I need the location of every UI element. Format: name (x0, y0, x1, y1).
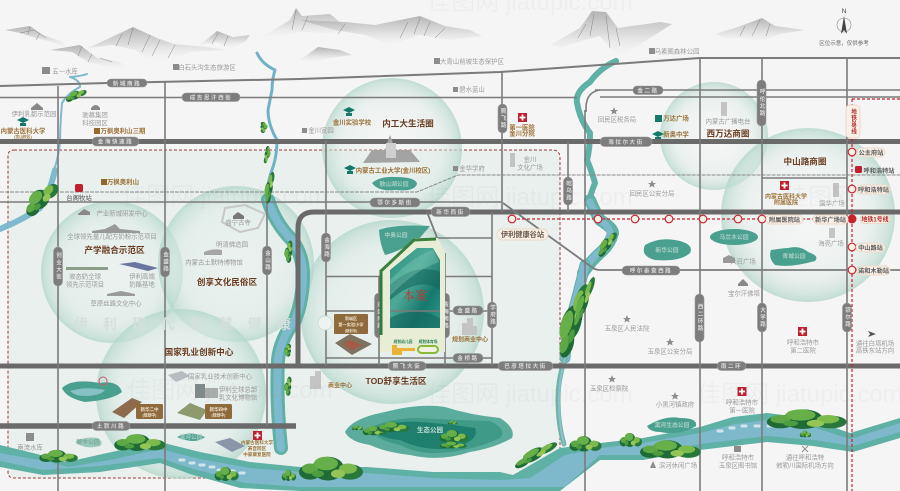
park labels: 敕山湖公园 (380, 180, 409, 188)
road name pills: 金盛路 (457, 306, 479, 314)
compass and disclaimer: N (842, 8, 847, 15)
eco lake park: 生态公园 (417, 425, 444, 434)
park labels: 黑河生态公园 (655, 421, 690, 429)
gray place labels: 奶酪基地 (129, 280, 155, 288)
metro station labels: 呼和浩特站 (864, 167, 894, 175)
road name pills: 金海路 (323, 236, 330, 258)
gray place labels: 玉泉区公安分局 (648, 346, 692, 356)
park labels: 马兰木公园 (720, 233, 749, 241)
road name pills: 新华西街 (436, 208, 465, 216)
road name pills: 鄂尔多斯街 (377, 198, 413, 206)
park labels: 滨河公园 (179, 433, 203, 441)
parks and complex thumbnails (62, 381, 122, 402)
metro station labels: 附属医院站 (769, 216, 800, 224)
brown place labels: 商业中心 (328, 382, 352, 390)
road name pills (54, 79, 852, 430)
gray place labels: 全球领先量儿配方奶粉示范项目 (67, 232, 157, 240)
district headings: 内工大生活圈 (382, 118, 434, 128)
gray place labels: 玉泉区图书馆 (719, 460, 757, 470)
metro station labels: 伊利健康谷站 (501, 230, 544, 239)
gray place labels: 海亮广场 (818, 238, 844, 248)
compass and disclaimer (819, 8, 869, 47)
gray place labels: 草原丝路文化中心 (90, 298, 142, 308)
gray place labels: 碧水蓝山 (459, 84, 485, 94)
road name pills: 金盛南路 (376, 300, 383, 330)
metro station labels: 地铁2号线 (850, 108, 857, 135)
watermark (122, 0, 900, 408)
park labels: 新华公园 (655, 246, 679, 254)
road name pills: 呼伦北路 (758, 88, 765, 117)
brown place labels: 附属医院 (774, 198, 798, 206)
metro station labels: 地铁1号线 (861, 216, 889, 224)
gray place labels: 乌素图森林公园 (655, 46, 699, 56)
road name pills: 土默川路 (97, 422, 125, 430)
district headings: 国家乳业创新中心 (165, 346, 234, 357)
watermark: 佳图网 jiatupic.com (127, 377, 333, 404)
brown place labels: 金川实验学校 (333, 118, 372, 126)
gray place labels: 回民区公安分局 (630, 188, 674, 198)
site name: 本案 (402, 288, 428, 303)
road name pills: 成吉思汗西街 (190, 94, 232, 102)
brown place labels: 中蒙康复医院 (243, 451, 271, 458)
watermark: 佳图网 jiatupic.com (427, 184, 633, 211)
road name pills: 金二路 (637, 86, 659, 94)
metro station labels (497, 105, 894, 275)
gray place labels: 驰慕集团 (82, 110, 108, 119)
gray place labels: 五一水库 (52, 66, 78, 76)
gray place labels: 大召广场 (730, 256, 756, 266)
watermark: 佳图网 jiatupic.com (697, 381, 900, 408)
gray place labels: 产业新城研发中心 (96, 208, 148, 218)
building glyphs (510, 153, 515, 167)
park labels: 青城公园 (782, 252, 806, 260)
hospital icons (75, 113, 807, 440)
road name pills: 巴彦塔拉大街 (504, 362, 547, 370)
road name pills: 金山路 (264, 249, 271, 271)
metro station labels: 诺和木勒站 (858, 267, 889, 275)
road name pills: 西二环路 (696, 304, 703, 332)
gray place labels: 大青山前坡生态保护区 (440, 56, 505, 66)
watermark: 佳图网 jiatupic.com (427, 381, 633, 408)
metro station labels: 呼和浩特站 (858, 186, 889, 194)
brown place labels: 内蒙古医科大学 (1, 126, 46, 135)
brown building icons (94, 128, 107, 185)
road name pills: 金海南路 (442, 300, 449, 330)
central buildings and icons (31, 102, 839, 452)
gray place labels: 南流水库 (17, 442, 43, 452)
gray place labels: 台阁牧站 (66, 193, 92, 202)
university building (363, 135, 420, 163)
road name pills: 南二环 (721, 362, 742, 370)
brown school tags: 新华二中 (140, 406, 159, 413)
faint band title: 伊利现代智慧健康 (74, 316, 306, 332)
gray place labels: 金川宽园 (308, 126, 334, 134)
brown place labels: 新奥中学 (663, 130, 689, 138)
brown place labels: 万枫奥利山三期 (101, 126, 145, 135)
gray place labels: 领先示范项目 (66, 280, 104, 288)
district headings (84, 118, 826, 386)
road name pills: 新城南路 (113, 80, 141, 88)
education icons (17, 107, 664, 174)
gray place labels: 液态奶全球 (69, 272, 102, 280)
gray place labels: 通往呼和浩特 (786, 452, 825, 462)
gray place labels: 伊利高端 (129, 272, 155, 280)
gray place labels: 伊利全球总部 (219, 384, 258, 394)
gray place labels: 小黑河镇政府 (656, 400, 695, 408)
gray place labels: 乳文化博物馆 (219, 392, 257, 402)
brown school tags: (规划中) (143, 412, 157, 418)
project site: 规划体育场 (419, 339, 438, 344)
park labels: 蒙牛公园 (76, 438, 100, 446)
trees (19, 86, 847, 481)
district headings: 产学融合示范区 (84, 244, 145, 255)
watermark: 佳图网 (784, 184, 856, 211)
project site (380, 238, 445, 355)
district headings: 中山路商圈 (784, 156, 826, 166)
brown place labels: 万达广场 (663, 114, 689, 122)
park labels (76, 180, 806, 446)
brown school tags: (规划中) (345, 328, 357, 333)
gray place labels: 呼和浩特市 (722, 452, 755, 462)
gray place labels: 第一医院 (729, 406, 755, 414)
gray place labels: 金川 (524, 154, 536, 164)
parks (75, 177, 816, 447)
gray place labels: 通往白塔机场 (856, 338, 894, 348)
planning zone with dashed boundary (8, 150, 560, 478)
gray place labels: 高铁东站方向 (856, 346, 894, 354)
gray place labels: 玉泉区人民法院 (605, 324, 650, 332)
road name pills: 腾飞大街 (393, 362, 421, 370)
road name pills: 金桥路 (457, 354, 479, 362)
brown place labels: (金山校区) (14, 134, 33, 139)
road name pills: 鄂尔路 (844, 306, 851, 328)
road name pills: 学府路 (489, 303, 496, 326)
gray place labels: 呼和浩特市 (726, 398, 759, 406)
gray place labels: 文化广场 (517, 162, 543, 172)
road name pills: 大学路 (759, 306, 766, 328)
park labels: 中奥公园 (384, 231, 408, 239)
brown place labels: 金川分院 (509, 128, 535, 138)
gray place labels: 敕勒川国际机场方向 (776, 460, 834, 470)
compass and disclaimer: 区位示意，仅供参考 (819, 39, 869, 47)
gray place labels: 内蒙古广播电台 (706, 116, 750, 126)
gray place labels: 内蒙古土默特博物馆 (185, 258, 243, 266)
brown place labels (1, 114, 807, 458)
gray place labels: 白石头沟生态旅游区 (178, 62, 236, 72)
brown place labels: 第一医院 (509, 122, 535, 132)
watermark: 佳图网 jiatupic.com (122, 183, 328, 210)
gray place labels: 科技园区 (82, 118, 108, 127)
brown place labels: 内蒙古工业大学(金川校区) (356, 166, 430, 174)
mountains (5, 8, 805, 69)
district headings: 创享文化民俗区 (197, 276, 257, 287)
district headings: 西万达商圈 (707, 128, 749, 138)
eco lake park (345, 406, 513, 458)
gray place labels: 呼和浩特市 (787, 338, 820, 346)
brown school tags: 新城区 (345, 315, 357, 321)
district headings: TOD舒享生活区 (366, 375, 427, 386)
gray place labels: 第二医院 (790, 346, 816, 354)
brown place labels: 规划商业中心 (452, 336, 488, 344)
main river (0, 413, 900, 491)
gray place labels: 宝尔汗佛塔 (728, 288, 761, 298)
gray place labels: 回民区税务局 (598, 114, 636, 124)
brown school tags: 新华四中 (210, 406, 228, 413)
lifestyle circles (41, 78, 895, 479)
metro station labels: 公主府站 (859, 149, 883, 157)
gray place labels: 玉泉区检察院 (590, 384, 629, 392)
brown place labels: 内蒙古医科大学 (241, 439, 273, 446)
brown school tags (136, 314, 368, 419)
road name pills: 昭乌路 (565, 180, 572, 202)
project site: 规划幼儿园 (394, 339, 413, 344)
metro station labels: 中山路站 (858, 244, 883, 252)
gray place labels: 伊利乳都示范园 (12, 109, 56, 118)
road name pills: 金海快速路 (98, 138, 133, 146)
brown place labels: 万枫奥利山 (107, 177, 139, 186)
metro station labels: 新华广场站 (815, 216, 846, 224)
road name pills: 金盛路 (162, 250, 169, 273)
brown school tags: (规划中) (212, 412, 226, 418)
metro line 1 and 2 (508, 99, 900, 491)
gray place labels: 明清佛造园 (216, 240, 248, 248)
road name pills: 海拉尔大街 (608, 138, 644, 146)
gray place labels: 金华学府 (459, 164, 485, 172)
gray place labels: 盛宁古寺 (225, 218, 251, 226)
gray place labels: 国家乳业技术创新中心 (188, 372, 253, 380)
road name pills: 腾飞路 (500, 107, 506, 129)
brown place labels: 赛音院区 (248, 445, 267, 452)
gray place labels: 滨河休闲广场 (659, 460, 697, 470)
road name pills: 呼尔泰查西路 (630, 266, 672, 274)
rivers (0, 53, 616, 448)
brown school tags: 第一实验小学 (338, 321, 364, 328)
gray place labels: 国华广场 (819, 198, 845, 208)
road name pills: 创业大街 (55, 251, 62, 281)
brown place labels: 内蒙古医科大学 (765, 192, 807, 200)
